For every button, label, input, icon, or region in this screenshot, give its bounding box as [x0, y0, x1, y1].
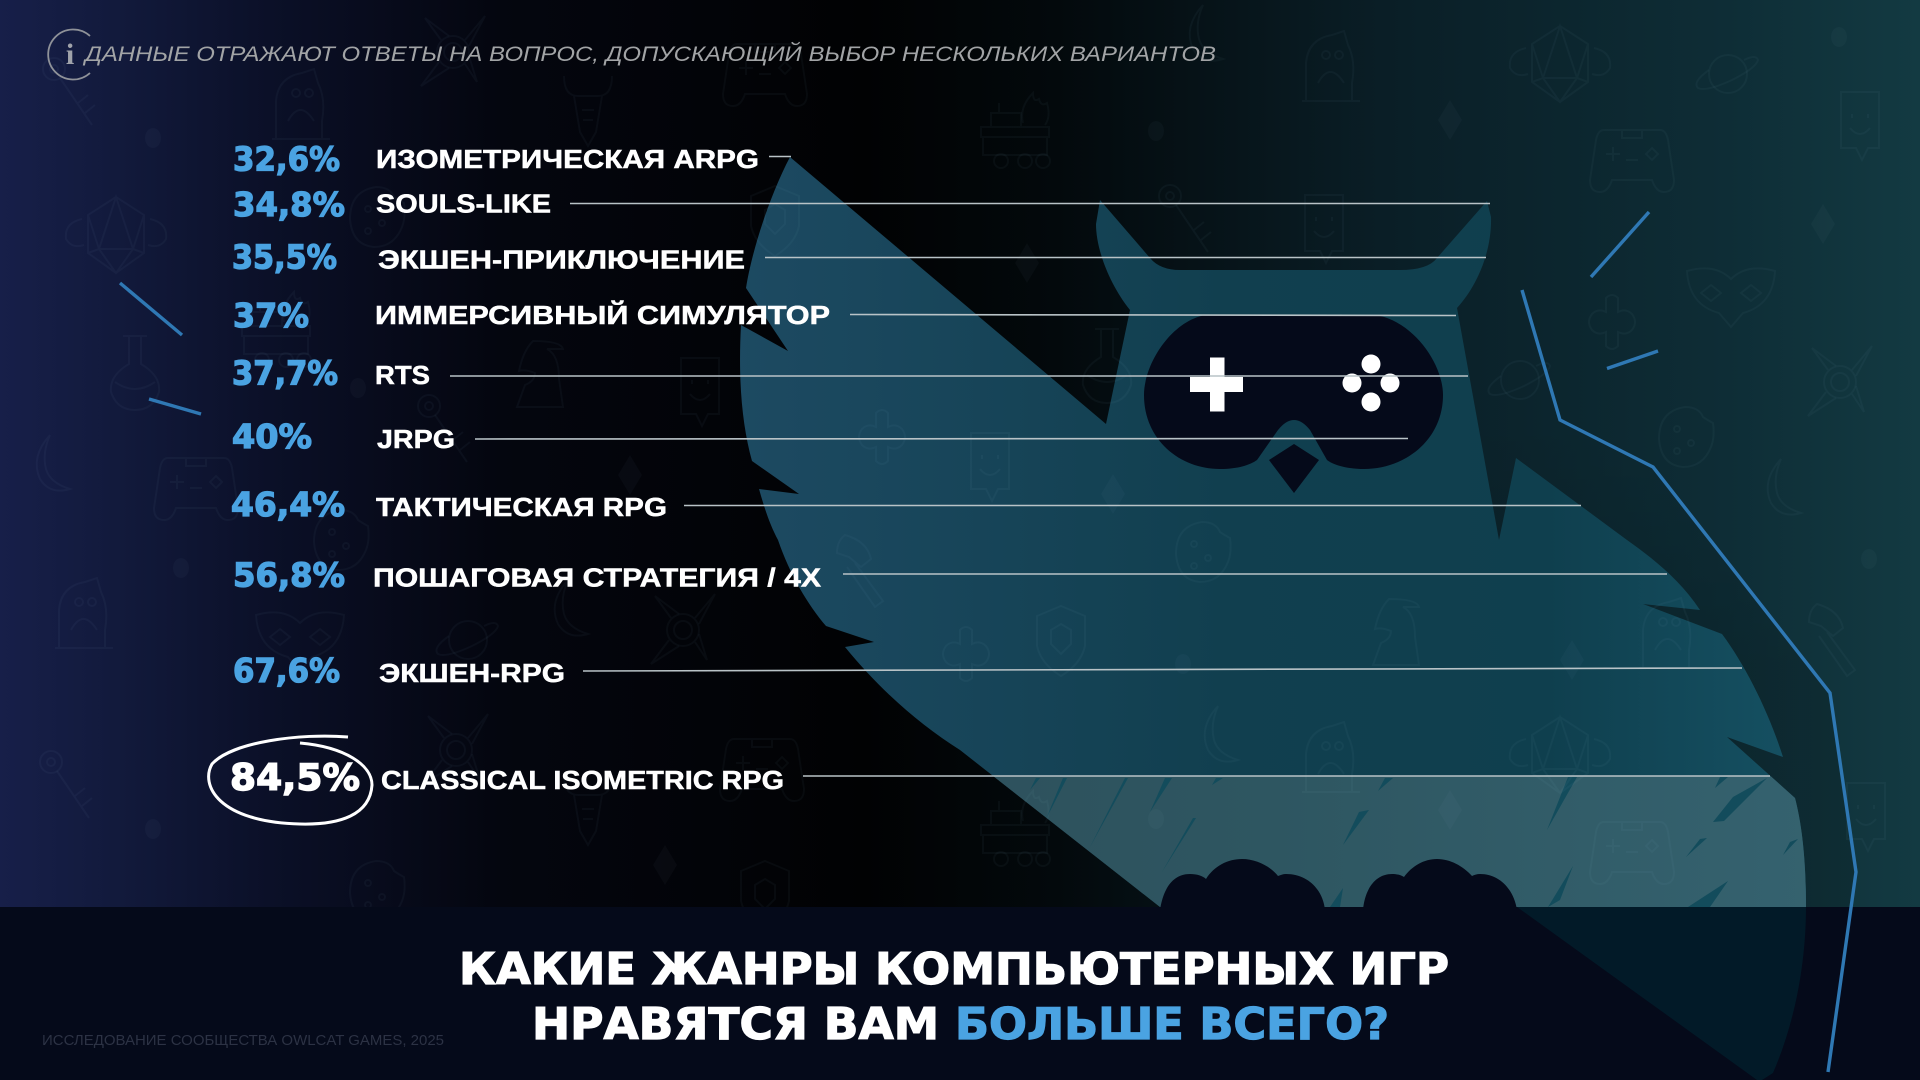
row: action RPG	[233, 652, 1742, 690]
row: RTS	[232, 354, 1468, 392]
row: immersive sim: 37%	[233, 297, 309, 335]
row: RTS: 37,7%	[232, 354, 338, 392]
owl silhouette	[730, 150, 1820, 910]
row: isometric ARPG	[233, 140, 791, 178]
hand-drawn highlight circle	[209, 736, 372, 824]
row: souls-like	[233, 186, 1490, 224]
eye mask shape	[1144, 315, 1443, 469]
genre list	[209, 140, 1770, 824]
row: JRPG	[232, 418, 1408, 456]
row: JRPG: 40%	[232, 418, 312, 456]
icon: info: i	[66, 38, 74, 71]
owl beak	[1269, 444, 1319, 493]
row: souls-like: SOULS-LIKE	[376, 188, 551, 218]
row: classical isometric RPG: CLASSICAL ISOMETRIC RPG	[381, 765, 784, 795]
right accent ray	[1591, 212, 1649, 277]
left accent ray	[120, 283, 182, 335]
note text: ДАННЫЕ ОТРАЖАЮТ ОТВЕТЫ НА ВОПРОС, ДОПУСКАЮЩИЙ ВЫБОР НЕСКОЛЬКИХ ВАРИАНТОВ	[83, 43, 1216, 66]
right accent ray small	[1607, 351, 1658, 368]
left accent ray small	[149, 399, 201, 414]
title	[459, 944, 1449, 1050]
belly feather marks	[1030, 777, 1798, 907]
row: RTS: RTS	[375, 360, 430, 390]
icon: gamepad cross	[1190, 358, 1243, 412]
info note	[48, 29, 1216, 80]
cloak outline	[1522, 290, 1856, 1072]
rays and cloak outline	[120, 212, 1856, 1072]
row: classical isometric RPG: 84,5%	[230, 756, 360, 799]
footer source note: ИССЛЕДОВАНИЕ СООБЩЕСТВА OWLCAT GAMES, 2025	[42, 1032, 444, 1049]
row: turn-based strategy	[233, 556, 1667, 594]
icon: gamepad buttons	[1342, 354, 1400, 412]
row: classical isometric RPG	[209, 736, 1770, 824]
row: tactical RPG	[231, 486, 1581, 524]
row: turn-based strategy: ПОШАГОВАЯ СТРАТЕГИЯ / 4X	[373, 562, 822, 592]
title: НРАВЯТСЯ ВАМ	[532, 999, 939, 1050]
row: tactical RPG: 46,4%	[231, 486, 345, 524]
row: immersive sim	[233, 297, 1456, 335]
title: БОЛЬШЕ ВСЕГО?	[955, 999, 1389, 1050]
owl lower body inside banner	[1517, 907, 1806, 1080]
row: isometric ARPG: 32,6%	[233, 140, 340, 178]
right paw	[1363, 859, 1517, 910]
row: action-adventure: 35,5%	[232, 238, 337, 276]
row: JRPG: JRPG	[377, 424, 455, 454]
row: tactical RPG: ТАКТИЧЕСКАЯ RPG	[376, 492, 667, 522]
icon: info	[48, 29, 90, 80]
title: КАКИЕ ЖАНРЫ КОМПЬЮТЕРНЫХ ИГР	[459, 944, 1449, 995]
row: action-adventure	[232, 238, 1486, 276]
row: immersive sim: ИММЕРСИВНЫЙ СИМУЛЯТОР	[375, 300, 830, 330]
row: action RPG: 67,6%	[233, 652, 340, 690]
row: action-adventure: ЭКШЕН-ПРИКЛЮЧЕНИЕ	[378, 244, 745, 274]
bottom banner	[0, 907, 1920, 1080]
row: action RPG: ЭКШЕН-RPG	[379, 658, 565, 688]
left paw	[1160, 859, 1325, 910]
row: turn-based strategy: 56,8%	[233, 556, 345, 594]
owl lighter belly	[994, 776, 1806, 907]
owl eye mask with gamepad	[1144, 315, 1443, 493]
owl paws	[1160, 859, 1517, 910]
row: souls-like: 34,8%	[233, 186, 345, 224]
shadow band beside owl	[1450, 419, 1856, 907]
row: isometric ARPG: ИЗОМЕТРИЧЕСКАЯ ARPG	[376, 144, 759, 174]
